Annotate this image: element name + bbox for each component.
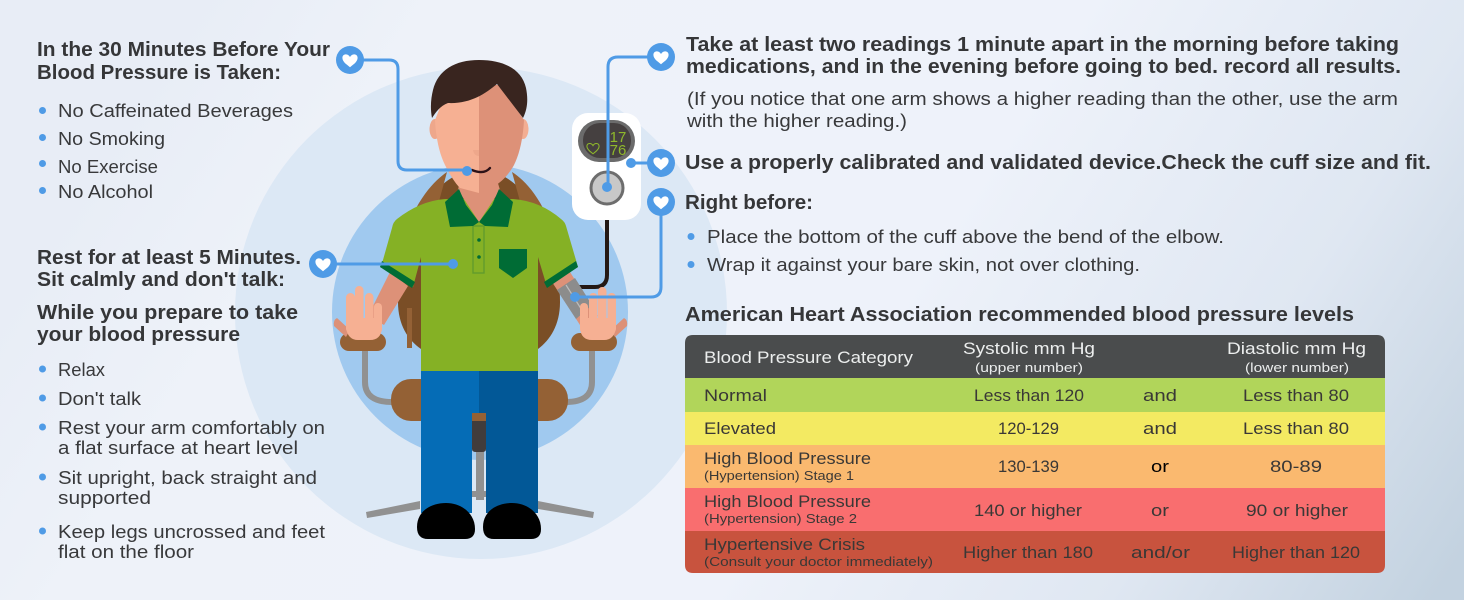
- inner circle: [332, 164, 628, 460]
- list: preparation: flat on the floor: [58, 542, 194, 562]
- heading: right before: Right before:: [685, 192, 813, 214]
- text: take two readings: medications, and in the evening before going to bed. record all results.: [686, 56, 1401, 78]
- icon: heart badge, rest: [309, 250, 337, 278]
- icon: heart badge, right before: [647, 188, 675, 216]
- table header: (upper number): [975, 360, 1083, 375]
- chair base and pole: [366, 450, 594, 518]
- row: elevated: Elevated: [704, 419, 776, 438]
- heading: while you prepare: your blood pressure: [37, 324, 240, 346]
- heading: 30 minutes before: [37, 39, 330, 84]
- list: preparation: supported: [58, 488, 151, 508]
- list: preparation: Keep legs uncrossed and feet: [58, 522, 325, 542]
- row: normal: and: [1143, 386, 1177, 405]
- text: arm note: (If you notice that one arm shows a higher reading than the other, use the arm: [687, 89, 1398, 109]
- icon: heart badge, device: [647, 149, 675, 177]
- chair back: [398, 170, 560, 349]
- row: crisis: Hypertensive Crisis: [704, 535, 865, 554]
- row: stage 2: [704, 492, 1348, 526]
- icon: heart badge, before reading: [336, 46, 364, 74]
- list: preparation: Relax: [58, 360, 105, 380]
- row: normal: [704, 386, 1349, 405]
- row: crisis: Higher than 180: [963, 543, 1093, 562]
- row: elevated: and: [1143, 419, 1177, 438]
- connector dots: [448, 158, 636, 302]
- face: [435, 85, 524, 193]
- monitor dial: [591, 172, 623, 204]
- list: preparation: a flat surface at heart level: [58, 438, 298, 458]
- illustration: seated person: [334, 60, 627, 539]
- row: stage 1: High Blood Pressure: [704, 449, 871, 468]
- table header: Blood Pressure Category: [704, 348, 914, 367]
- text: take two readings: Take at least two readings 1 minute apart in the morning before taking: [686, 34, 1399, 56]
- right hand: [580, 287, 616, 340]
- list: things to avoid: [39, 101, 293, 202]
- row: crisis: [704, 535, 1360, 569]
- heading: AHA levels: American Heart Association recommended blood pressure levels: [685, 304, 1354, 326]
- list: things to avoid: No Caffeinated Beverages: [58, 101, 293, 121]
- row: normal: Less than 80: [1243, 386, 1349, 405]
- row: crisis: Higher than 120: [1232, 543, 1360, 562]
- text: calibrated device: Use a properly calibrated and validated device.Check the cuff size and fit.: [685, 152, 1431, 174]
- table header: [704, 339, 1366, 375]
- list: things to avoid: No Alcohol: [58, 182, 153, 202]
- heading: rest: [37, 247, 301, 291]
- hair: [431, 60, 527, 118]
- heading: 30 minutes before: Blood Pressure is Taken:: [37, 62, 281, 84]
- heading: 30 minutes before: In the 30 Minutes Before Your: [37, 39, 330, 61]
- heading: rest: Rest for at least 5 Minutes.: [37, 247, 301, 269]
- device: blood pressure monitor: [572, 113, 641, 220]
- row: stage 2: (Hypertension) Stage 2: [704, 511, 857, 526]
- heading: while you prepare: While you prepare to take: [37, 302, 298, 324]
- row: stage 1: 130-139: [998, 457, 1059, 476]
- row: crisis: and/or: [1131, 543, 1190, 562]
- heading: while you prepare: [37, 302, 298, 346]
- ears: [430, 119, 528, 139]
- table header: (lower number): [1245, 360, 1349, 375]
- row: stage 2: 90 or higher: [1246, 501, 1348, 520]
- row: stage 2: High Blood Pressure: [704, 492, 871, 511]
- row: stage 1: (Hypertension) Stage 1: [704, 468, 854, 483]
- table header: Systolic mm Hg: [963, 339, 1095, 358]
- row: normal: Normal: [704, 386, 767, 405]
- blood pressure cuff: [557, 278, 592, 319]
- list: things to avoid: No Smoking: [58, 129, 165, 149]
- heading: rest: Sit calmly and don't talk:: [37, 269, 285, 291]
- text: arm note: with the higher reading.): [686, 111, 907, 131]
- row: crisis: (Consult your doctor immediately): [704, 554, 933, 569]
- table: blood pressure levels: [685, 335, 1385, 573]
- armrests: [340, 333, 617, 351]
- chair arm supports: [365, 350, 592, 402]
- collar: [445, 189, 513, 227]
- list: things to avoid: No Exercise: [58, 157, 158, 177]
- row: stage 2: 140 or higher: [974, 501, 1082, 520]
- callout connectors: [323, 57, 661, 297]
- chair seat: [391, 379, 568, 421]
- list: preparation: Don't talk: [58, 389, 142, 409]
- monitor heart: [587, 144, 599, 154]
- shoes: [417, 503, 541, 539]
- list: preparation: Rest your arm comfortably on: [58, 418, 325, 438]
- row: elevated: 120-129: [998, 419, 1059, 438]
- chair column: [472, 413, 486, 452]
- list: preparation: [39, 360, 325, 562]
- text: take two readings: [686, 34, 1401, 78]
- row: elevated: Less than 80: [1243, 419, 1349, 438]
- text: arm note: [686, 89, 1398, 131]
- shirt: [380, 199, 578, 371]
- neck: [458, 180, 500, 222]
- row: normal: Less than 120: [974, 386, 1084, 405]
- list: preparation: Sit upright, back straight and: [58, 468, 317, 488]
- icon: heart badge, readings: [647, 43, 675, 71]
- list: right before: Wrap it against your bare skin, not over clothing.: [707, 255, 1140, 275]
- row: stage 1: 80-89: [1270, 457, 1322, 476]
- outer circle: [235, 67, 727, 559]
- row: stage 2: or: [1151, 501, 1169, 520]
- table rows: [685, 335, 1385, 573]
- row: elevated: [704, 419, 1349, 438]
- list: right before: [688, 227, 1224, 275]
- cuff tube: [578, 220, 607, 287]
- list: right before: Place the bottom of the cuff above the bend of the elbow.: [707, 227, 1224, 247]
- device: blood pressure monitor: 76: [610, 142, 626, 159]
- table header: Diastolic mm Hg: [1227, 339, 1366, 358]
- left hand: [346, 286, 382, 340]
- arms: [334, 272, 627, 337]
- monitor readout: 17: [610, 129, 626, 146]
- row: stage 1: or: [1151, 457, 1169, 476]
- pants: [421, 365, 538, 513]
- row: stage 1: [704, 449, 1322, 483]
